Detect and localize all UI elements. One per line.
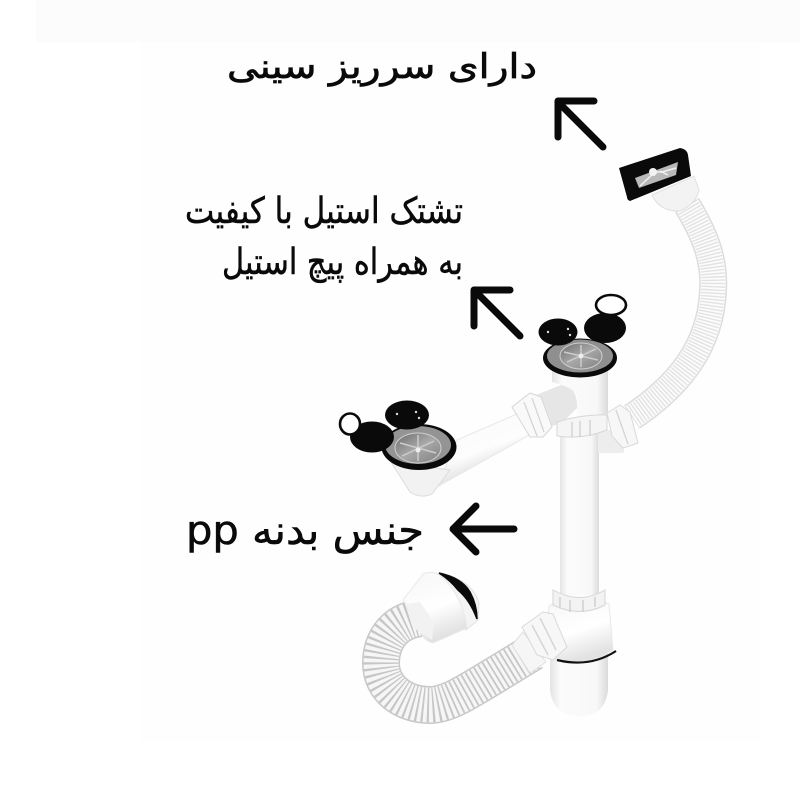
arm nut (512, 393, 552, 437)
side nut (522, 612, 567, 660)
lower cap ring (340, 414, 360, 434)
heading: overflow tray label: دارای سرریز سینی (227, 47, 537, 87)
vertical pipe upper collar (557, 415, 607, 437)
trap outlet tube (512, 632, 546, 673)
arrow: to steel strainer (474, 290, 520, 336)
right side tube and nut (598, 405, 638, 453)
wall connector cap (403, 572, 479, 643)
bottle trap body (547, 597, 613, 662)
lower strainer (382, 424, 456, 470)
horizontal arm (437, 407, 533, 487)
arrow: to trap body (453, 506, 514, 552)
bottle trap cup (550, 650, 608, 716)
upper strainer plug (538, 318, 578, 346)
text: steel strainer line 1: تشتک استیل با کیفیت (185, 191, 463, 232)
black sealing ring (557, 651, 616, 663)
text: steel strainer line 2: به همراه پیچ استیل (222, 242, 463, 283)
lower strainer plug (385, 400, 429, 430)
vertical pipe lower collar (553, 590, 605, 612)
upper strainer funnel and branch (536, 368, 608, 428)
upper strainer (543, 338, 617, 378)
vertical pipe (560, 425, 599, 595)
upper cap ring (596, 295, 626, 315)
overflow tray (619, 148, 699, 211)
upper strainer cap (584, 313, 626, 343)
lower strainer funnel (391, 462, 450, 496)
overflow hose (632, 205, 713, 417)
arrow: to overflow tray (558, 101, 603, 147)
trap hose (381, 618, 533, 705)
lower strainer cap (350, 422, 394, 452)
text: body material label: جنس بدنه pp (186, 508, 424, 554)
